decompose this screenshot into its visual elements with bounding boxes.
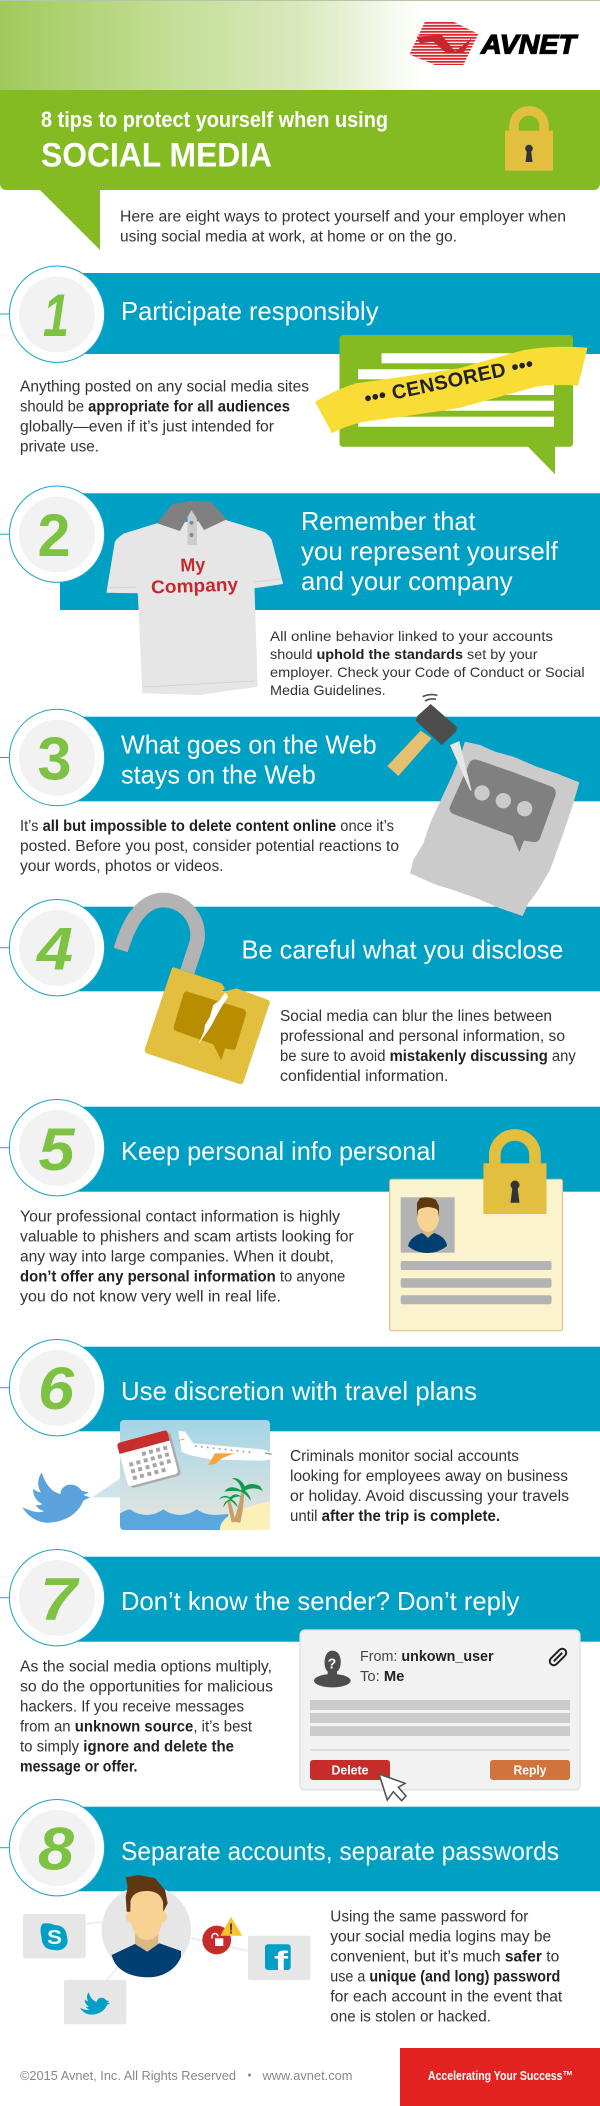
section 7: Don't know the sender? Don't reply	[0, 1550, 600, 1801]
body text: be sure to avoid mistakenly discussing any	[280, 1048, 576, 1065]
plane	[178, 1431, 273, 1465]
body text	[290, 1448, 569, 1525]
body text	[20, 818, 399, 875]
body text: until after the trip is complete.	[290, 1508, 500, 1525]
heading band	[60, 1557, 600, 1642]
body text: employer. Check your Code of Conduct or Social	[270, 664, 585, 680]
body text: posted. Before you post, consider potential reactions to	[20, 838, 399, 855]
body text: should be appropriate for all audiences	[20, 399, 290, 416]
body text: Your professional contact information is highly	[20, 1209, 340, 1226]
title banner	[0, 90, 600, 250]
body text: you do not know very well in real life.	[20, 1289, 281, 1306]
palm trees	[218, 1478, 263, 1523]
heading: Keep personal info personal	[121, 1136, 436, 1166]
heading: Be careful what you disclose	[242, 934, 563, 964]
icon: padlock	[505, 111, 553, 171]
body text: message or offer.	[20, 1759, 138, 1776]
icon: broken padlock	[121, 900, 270, 1084]
intro text: Here are eight ways to protect yourself and your employer when	[120, 209, 566, 226]
body text: Using the same password for	[330, 1909, 528, 1926]
body text: Criminals monitor social accounts	[290, 1448, 519, 1465]
shirt label	[150, 552, 239, 597]
body text	[280, 1008, 576, 1085]
heading: stays on the Web	[121, 759, 316, 789]
heading: and your company	[301, 566, 513, 596]
icon: hammer, nail and torn paper	[387, 695, 579, 916]
heading: Remember that	[301, 506, 476, 536]
number badge: 3	[38, 725, 72, 792]
heading band	[60, 1347, 600, 1431]
intro text: using social media at work, at home or on the go.	[120, 229, 457, 246]
number badge	[0, 266, 105, 362]
body text: Media Guidelines.	[270, 682, 386, 698]
body text: valuable to phishers and scam artists looking for	[20, 1229, 354, 1246]
skype tile: S	[47, 1927, 62, 1949]
body text: confidential information.	[280, 1068, 448, 1085]
number badge	[0, 1100, 105, 1196]
number badge: 7	[40, 1565, 80, 1632]
icon: paperclip	[548, 1647, 568, 1667]
sender: From: unkown_user	[360, 1648, 494, 1665]
number badge	[0, 1800, 105, 1896]
shirt label: Company	[151, 573, 239, 597]
icon: mouse cursor	[379, 1774, 406, 1801]
bullet separator	[248, 2074, 251, 2076]
number badge: 1	[43, 282, 69, 349]
number badge	[0, 1550, 105, 1646]
logo mark	[409, 22, 478, 65]
heading band	[60, 493, 600, 610]
body text: private use.	[20, 439, 99, 456]
delete button	[310, 1760, 390, 1780]
heading: Don’t know the sender? Don’t reply	[121, 1586, 519, 1616]
skype tile	[23, 1914, 86, 1958]
heading band	[60, 717, 600, 801]
body text: As the social media options multiply,	[20, 1659, 272, 1676]
icon: person with linked accounts	[23, 1875, 310, 2024]
recipient: To: Me	[360, 1668, 404, 1685]
section 3: What goes on the Web stays on the Web	[0, 695, 600, 916]
body text	[330, 1909, 563, 2026]
calendar	[117, 1429, 181, 1489]
person	[102, 1875, 191, 1977]
heading: Participate responsibly	[121, 296, 378, 326]
body text: use a unique (and long) password	[330, 1969, 560, 1986]
delete button: Delete	[332, 1762, 368, 1778]
body text	[270, 628, 585, 698]
facebook tile: f	[274, 1946, 290, 1976]
section 4: Be careful what you disclose	[0, 900, 600, 1085]
website: www.avnet.com	[262, 2068, 352, 2083]
body text: convenient, but it’s much safer to	[330, 1949, 559, 1966]
reply button: Reply	[514, 1762, 547, 1778]
icon: bird tweeting travel picture	[22, 1420, 273, 1530]
heading	[301, 506, 559, 596]
footer	[20, 2048, 600, 2106]
censored label: ••• CENSORED •••	[362, 353, 535, 410]
heading band	[60, 907, 600, 991]
body text: hackers. If you receive messages	[20, 1699, 244, 1716]
number badge: 8	[38, 1815, 75, 1882]
heading band	[60, 1807, 600, 1891]
body text: or holiday. Avoid discussing your travels	[290, 1488, 569, 1505]
bird	[22, 1472, 90, 1523]
number badge: 2	[38, 502, 70, 569]
title line 2: SOCIAL MEDIA	[41, 137, 272, 175]
icon: unknown sender silhouette	[314, 1651, 351, 1687]
header gradient	[0, 0, 600, 90]
number badge	[0, 900, 105, 996]
body text: don’t offer any personal information to anyone	[20, 1269, 345, 1286]
ID photo person	[408, 1197, 447, 1253]
censored ribbon	[315, 347, 588, 433]
body text: All online behavior linked to your accounts	[270, 628, 553, 644]
icon: hacked lock warning	[202, 1917, 242, 1954]
body text: should uphold the standards set by your	[270, 646, 538, 662]
number badge	[0, 709, 105, 806]
section 8: Separate accounts, separate passwords	[0, 1800, 600, 2026]
title line 1: 8 tips to protect yourself when using	[41, 107, 388, 132]
number badge: 4	[36, 915, 73, 982]
section 5: Keep personal info personal	[0, 1100, 600, 1331]
heading: you represent yourself	[301, 536, 559, 566]
tagline block	[400, 2048, 600, 2106]
message placeholder lines	[310, 1700, 570, 1751]
shirt label: My	[180, 554, 206, 575]
body text	[20, 379, 309, 456]
section 6: Use discretion with travel plans	[0, 1340, 600, 1530]
logo: Avnet	[409, 22, 579, 65]
number badge: 5	[38, 1116, 76, 1183]
heading	[121, 729, 377, 789]
reply button	[490, 1760, 570, 1780]
heading: What goes on the Web	[121, 729, 377, 759]
body text: from an unknown source, it’s best	[20, 1719, 253, 1736]
number badge: 6	[38, 1355, 75, 1422]
body text: professional and personal information, so	[280, 1028, 565, 1045]
body text: for each account in the event that	[330, 1989, 563, 2006]
number badge	[0, 486, 105, 582]
icon: hacked lock warning: !	[229, 1920, 233, 1938]
body text: looking for employees away on business	[290, 1468, 568, 1485]
icon: locked ID card	[390, 1135, 563, 1331]
body text: to simply ignore and delete the	[20, 1739, 234, 1756]
heading: Separate accounts, separate passwords	[121, 1836, 559, 1866]
section 1: Participate responsibly	[0, 266, 600, 474]
body text: your social media logins may be	[330, 1929, 551, 1946]
heading band	[60, 273, 600, 354]
padlock	[483, 1135, 546, 1214]
body text: Social media can blur the lines between	[280, 1008, 552, 1025]
icon: company polo shirt	[106, 501, 283, 695]
icon: unknown sender silhouette: ?	[328, 1656, 336, 1672]
copyright: ©2015 Avnet, Inc. All Rights Reserved	[20, 2068, 236, 2083]
body text: one is stolen or hacked.	[330, 2009, 491, 2026]
logo wordmark: AVNET	[480, 30, 579, 60]
number badge	[0, 1340, 105, 1436]
facebook tile	[248, 1936, 310, 1980]
section 2: Remember that you represent yourself	[0, 486, 600, 698]
body text: so do the opportunities for malicious	[20, 1679, 273, 1696]
body text: your words, photos or videos.	[20, 858, 224, 875]
body text	[20, 1209, 354, 1306]
body text: any way into large companies. When it doubt,	[20, 1249, 334, 1266]
heading band	[60, 1107, 600, 1192]
body text	[20, 1659, 273, 1776]
body text: It’s all but impossible to delete content online once it’s	[20, 818, 394, 835]
body text: globally—even if it’s just intended for	[20, 419, 274, 436]
heading: Use discretion with travel plans	[121, 1376, 477, 1406]
intro text	[120, 209, 566, 246]
icon: censored speech bubble	[315, 335, 588, 474]
twitter tile	[64, 1980, 126, 2024]
panel: email window	[300, 1630, 580, 1801]
body text: Anything posted on any social media sites	[20, 379, 309, 396]
